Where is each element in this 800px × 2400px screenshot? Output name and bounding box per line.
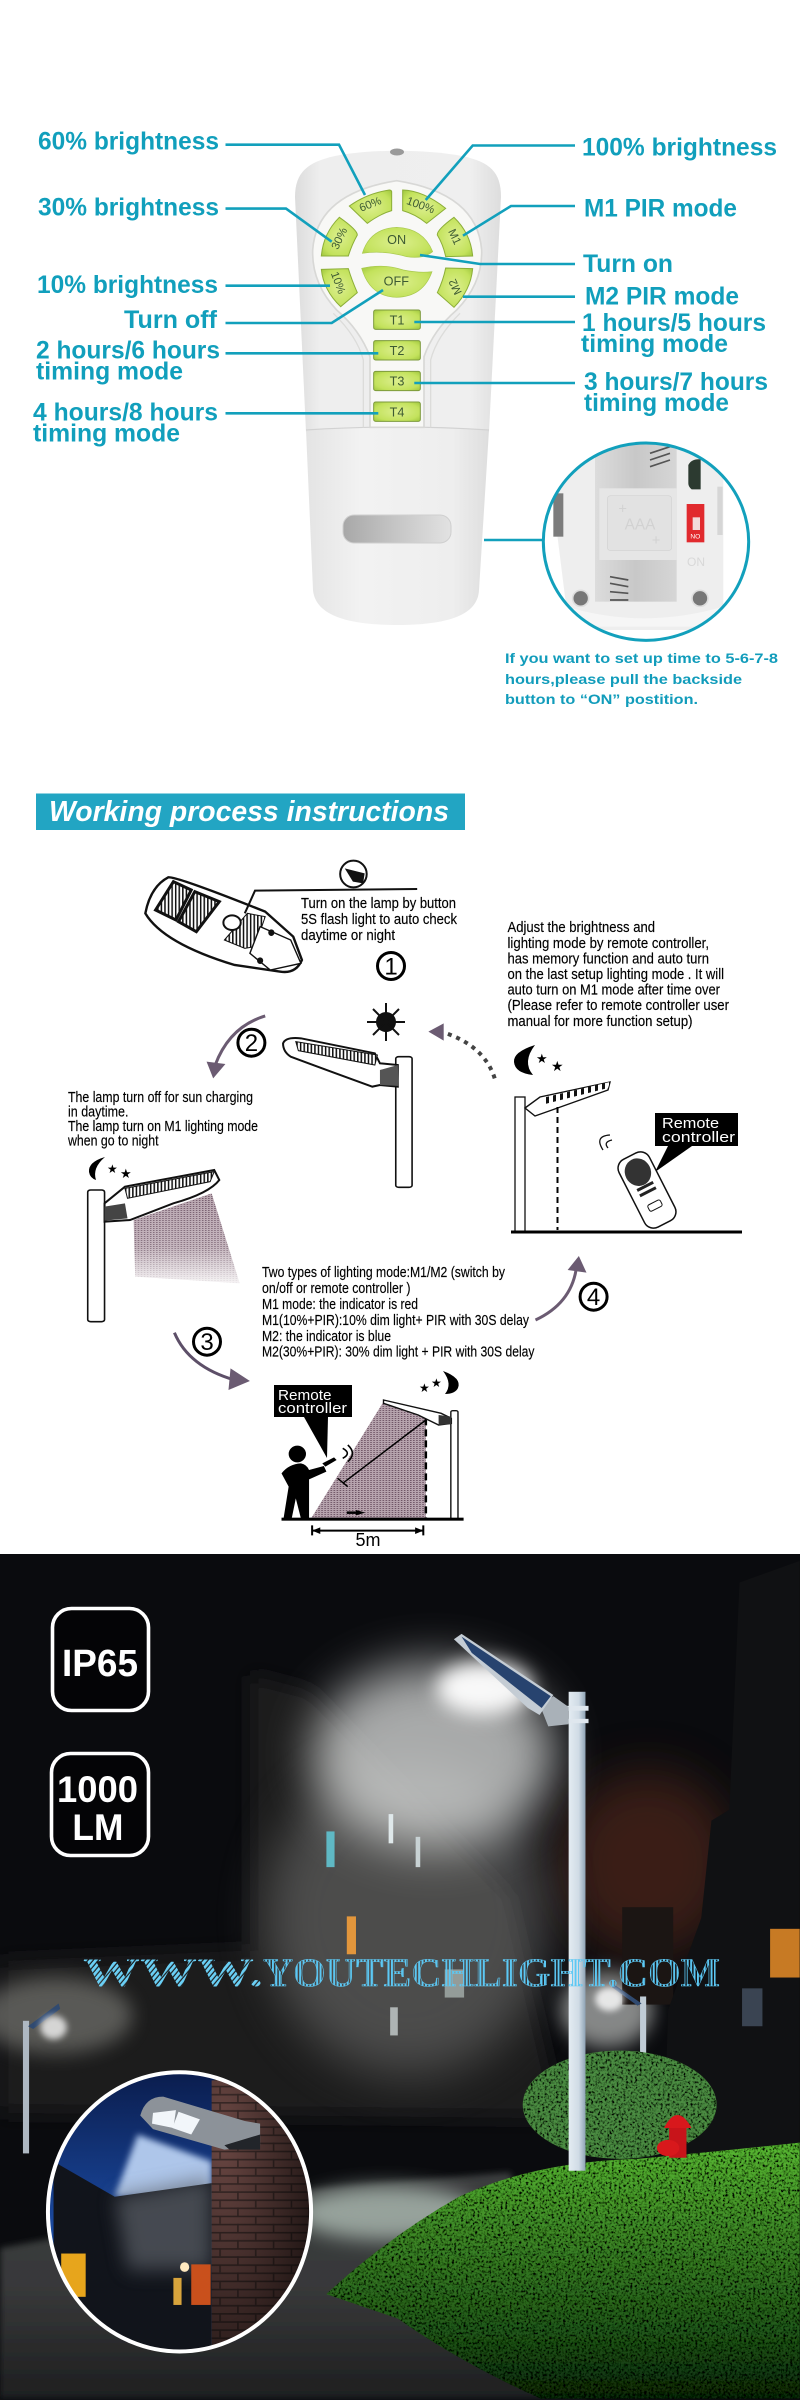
badge: IP65: IP65: [62, 1643, 138, 1685]
text: step 2 lamp off: The lamp turn off for sun charging: [68, 1090, 253, 1106]
number 2: [238, 1029, 265, 1057]
illustration: night lamp with remote: [511, 1082, 742, 1234]
illustration: remote label bottom: [274, 1385, 352, 1458]
label: 3 hours/7 hours timing mode: timing mode: [584, 389, 729, 417]
number 3: 3: [200, 1329, 214, 1356]
inset: wall lamp photo: [46, 2070, 314, 2356]
button 10%: 10%: [328, 270, 347, 296]
text: step 1 turn on: [301, 896, 458, 944]
caption: backside button note: If you want to set up time to 5-6-7-8: [505, 650, 778, 666]
text: step 4 adjust: on the last setup lighting mode . It will: [508, 967, 724, 983]
number 1: 1: [384, 954, 398, 980]
callout: back of remote inset: [484, 440, 753, 647]
button M2: [437, 268, 473, 307]
number 3: [194, 1328, 220, 1356]
text: step 2 lamp off: in daytime.: [68, 1104, 128, 1120]
grass mound: [326, 2143, 800, 2399]
illustration: remote label bottom: controller: [278, 1400, 347, 1417]
haze and building: [0, 1661, 653, 2118]
label: 60% brightness: 60% brightness: [38, 128, 219, 156]
lit road: [296, 2186, 479, 2240]
label: 60% brightness: [38, 128, 365, 195]
button 60%: [349, 190, 392, 223]
text: step 3 lighting modes: on/off or remote controller ): [262, 1281, 410, 1297]
illustration: remote label bottom: Remote: [278, 1387, 332, 1404]
text: step 4 adjust: manual for more function setup): [508, 1014, 692, 1030]
label: 100% brightness: 100% brightness: [582, 134, 777, 162]
number 4: [580, 1283, 607, 1311]
arrow: step 2: [207, 1016, 265, 1078]
illustration: night lamp with light beam: [88, 1170, 240, 1322]
text: step 4 adjust: [508, 920, 729, 1030]
caption: backside button note: [505, 650, 778, 707]
illustration: remote label top: Remote: [662, 1115, 719, 1132]
text: step 3 lighting modes: [262, 1265, 535, 1360]
illustration: remote use distance scene: 5m: [355, 1530, 381, 1550]
label: 3 hours/7 hours timing mode: [414, 368, 768, 417]
badge: 1000 LM: LM: [72, 1807, 123, 1848]
website watermark: YOUTECHLIGHT.COM: [263, 1950, 720, 1995]
label: 30% brightness: 30% brightness: [38, 194, 219, 222]
button ON: [362, 227, 433, 257]
label: 1 hours/5 hours timing mode: [414, 309, 766, 358]
badge: 1000 LM: [52, 1754, 148, 1856]
button T1: [374, 310, 420, 329]
road: [0, 2172, 586, 2399]
icon: moon and stars left: ★: [120, 1167, 132, 1182]
text: step 3 lighting modes: Two types of lighting mode:M1/M2 (switch by: [262, 1265, 506, 1281]
arrow: dashed return: [428, 1023, 495, 1078]
text: step 4 adjust: lighting mode by remote controller,: [508, 936, 709, 952]
illustration: remote label top: controller: [662, 1129, 735, 1146]
button 100%: [403, 190, 446, 223]
button 100%: 100%: [405, 195, 436, 216]
icon: hand press: [340, 861, 367, 887]
illustration: day lamp on pole: [283, 1038, 412, 1187]
callout: back of remote inset: NO: [690, 533, 700, 540]
icon: moon and stars right: ★: [551, 1059, 564, 1075]
windows: [326, 1814, 464, 2035]
label: 2 hours/6 hours timing mode: timing mode: [36, 358, 183, 386]
label: 100% brightness: [426, 134, 777, 200]
button M1: [437, 217, 473, 257]
text: step 1 turn on: daytime or night: [301, 928, 395, 944]
label: 1 hours/5 hours timing mode: timing mode: [581, 330, 728, 358]
badge: 1000 LM: 1000: [57, 1769, 138, 1810]
text: step 1 turn on: Turn on the lamp by button: [301, 896, 456, 912]
website watermark: [83, 1950, 720, 1995]
distant orange sky glow: [561, 1772, 734, 1956]
button M2: M2: [447, 277, 465, 296]
icon: moon and stars right: ★: [536, 1052, 548, 1067]
number 2: 2: [245, 1030, 258, 1057]
website watermark: WWW.: [83, 1950, 263, 1995]
remote button face: [313, 181, 482, 427]
callout: back of remote inset: +: [618, 501, 627, 517]
button T1: T1: [390, 313, 404, 327]
badge: IP65: [52, 1608, 148, 1710]
button T4: T4: [390, 405, 404, 419]
label: 3 hours/7 hours timing mode: 3 hours/7 hours: [584, 368, 768, 396]
number 1: [378, 952, 404, 980]
text: step 3 lighting modes: M1 mode: the indicator is red: [262, 1297, 418, 1313]
icon: moon and stars bottom: [419, 1371, 459, 1395]
label: 4 hours/8 hours timing mode: [33, 399, 378, 448]
text: step 3 lighting modes: M1(10%+PIR):10% dim light+ PIR with 30S delay: [262, 1313, 530, 1329]
illustration: lamp back with button: [145, 877, 417, 972]
label: 4 hours/8 hours timing mode: timing mode: [33, 420, 180, 448]
illustration: remote use distance scene: [282, 1400, 464, 1550]
right-hand buildings: [622, 1561, 800, 2172]
arrow: step 3: [174, 1333, 250, 1390]
icon: moon and stars left: ★: [107, 1162, 118, 1176]
label: Turn off: Turn off: [124, 306, 218, 334]
second lamp right: [595, 1983, 646, 2057]
label: Turn on: Turn on: [583, 250, 673, 278]
callout: back of remote inset: +: [652, 533, 660, 549]
silver slider button: [343, 515, 451, 543]
illustration: remote label top: [655, 1113, 738, 1172]
text: step 4 adjust: (Please refer to remote controller user: [508, 998, 729, 1014]
number 4: 4: [587, 1284, 600, 1311]
label: 30% brightness: [38, 194, 332, 242]
label: Turn off: [124, 290, 383, 334]
icon: moon and stars right: [514, 1045, 564, 1075]
callout: back of remote inset: AAA: [625, 516, 656, 533]
label: M1 PIR mode: M1 PIR mode: [584, 194, 737, 222]
button T4: [374, 402, 420, 421]
second lamp left: [23, 2004, 67, 2153]
callout: back of remote inset: ON: [687, 555, 705, 569]
button 30%: [321, 217, 357, 256]
text: step 2 lamp off: [67, 1090, 258, 1150]
icon: moon and stars left: [89, 1157, 132, 1182]
fire hydrant: [657, 2115, 692, 2158]
text: step 4 adjust: auto turn on M1 mode after time over: [508, 982, 720, 998]
button 30%: 30%: [330, 226, 350, 252]
heading band: Working process instructions: [49, 796, 449, 828]
text: step 1 turn on: 5S flash light to auto check: [301, 912, 458, 928]
text: step 2 lamp off: when go to night: [67, 1134, 158, 1150]
button ON: ON: [387, 233, 406, 247]
text: step 4 adjust: has memory function and auto turn: [508, 952, 709, 968]
remote controller body: [295, 148, 501, 625]
label: 10% brightness: 10% brightness: [37, 271, 218, 299]
caption: backside button note: hours,please pull the backside: [505, 671, 742, 687]
label: M1 PIR mode: [463, 194, 737, 236]
label: 4 hours/8 hours timing mode: 4 hours/8 hours: [33, 399, 218, 427]
panel: working process instructions: [36, 794, 742, 1550]
button T3: [374, 371, 420, 391]
button OFF: OFF: [384, 275, 409, 289]
caption: backside button note: button to “ON” postition.: [505, 691, 698, 707]
button 10%: [321, 269, 357, 307]
icon: moon and stars bottom: ★: [419, 1381, 430, 1395]
illustration: handheld remote: [600, 1135, 679, 1232]
icon: sun: [367, 1003, 405, 1041]
button OFF: [362, 266, 432, 297]
icon: moon and stars bottom: ★: [431, 1376, 442, 1390]
label: 2 hours/6 hours timing mode: 2 hours/6 hours: [36, 337, 220, 365]
text: step 4 adjust: Adjust the brightness and: [508, 920, 655, 936]
button T3: T3: [390, 375, 404, 389]
panel: night street photo scene: [0, 1554, 800, 2400]
bush: [523, 2051, 717, 2159]
label: M2 PIR mode: M2 PIR mode: [585, 283, 739, 311]
button 60%: 60%: [358, 195, 383, 215]
button T2: T2: [390, 344, 404, 358]
arrow: step 4: [536, 1256, 586, 1320]
text: step 3 lighting modes: M2(30%+PIR): 30% dim light + PIR with 30S delay: [262, 1344, 535, 1360]
label: Turn on: [420, 250, 673, 278]
panel: remote controller diagram: [33, 132, 778, 707]
button M1: M1: [445, 227, 463, 247]
text: step 2 lamp off: The lamp turn on M1 lighting mode: [68, 1119, 258, 1135]
label: 1 hours/5 hours timing mode: 1 hours/5 hours: [582, 309, 766, 337]
main lamp post: [454, 1634, 589, 2171]
label: 2 hours/6 hours timing mode: [36, 337, 378, 386]
text: step 3 lighting modes: M2: the indicator is blue: [262, 1329, 391, 1345]
button T2: [374, 341, 420, 360]
